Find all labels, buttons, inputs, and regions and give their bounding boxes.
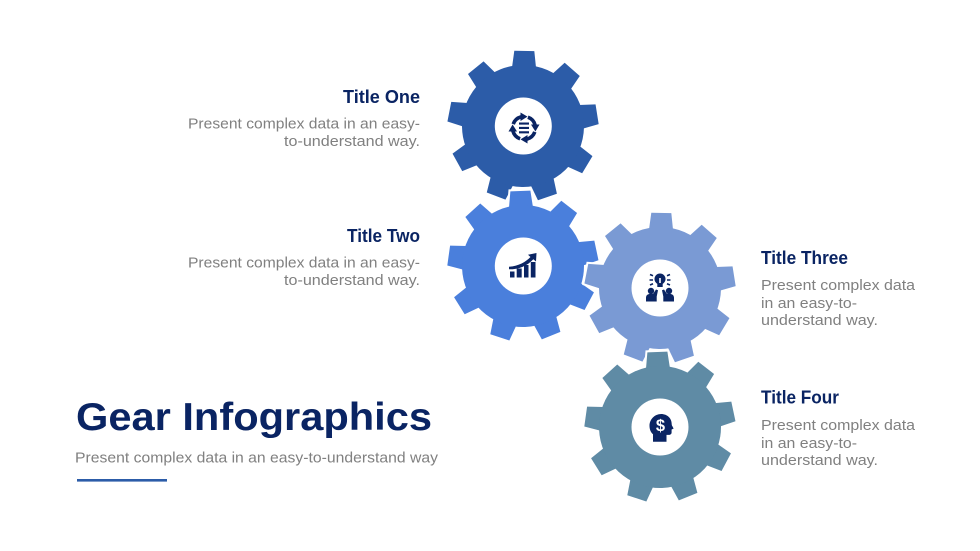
subtitle: Present complex data in an easy-to-understand way [75,450,439,466]
text block: title four: Title Four [761,388,839,408]
accent underline [77,479,167,482]
text block: title two: to-understand way. [284,273,420,289]
gear two [445,188,601,343]
text block: title three: understand way. [761,313,878,329]
gear one [446,50,600,201]
text block: title three: Present complex data [761,278,916,294]
text block: title three: in an easy-to- [761,296,857,312]
text block: title one: Title One [343,87,420,107]
text block: title one [188,87,420,150]
text block: title three: Title Three [761,248,848,268]
gear four [582,349,738,504]
text block: title three [761,248,916,329]
icon: growth chart [495,238,552,294]
text block: title two: Title Two [347,226,420,246]
icon: head with dollar [632,398,688,456]
gear three [583,212,737,363]
icon: cycle with list [495,98,552,154]
text block: title four: Present complex data [761,418,916,434]
text block: title one: Present complex data in an easy- [188,116,420,132]
text block: title four: understand way. [761,453,878,469]
text block: title two [188,226,420,289]
icon: head with dollar: $ [656,417,665,435]
icon: idea and people [632,260,688,316]
text block: title two: Present complex data in an easy- [188,256,420,272]
text block: title four [761,388,916,469]
text block: title four: in an easy-to- [761,436,857,452]
title: Gear Infographics [76,396,432,439]
text block: title one: to-understand way. [284,134,420,150]
